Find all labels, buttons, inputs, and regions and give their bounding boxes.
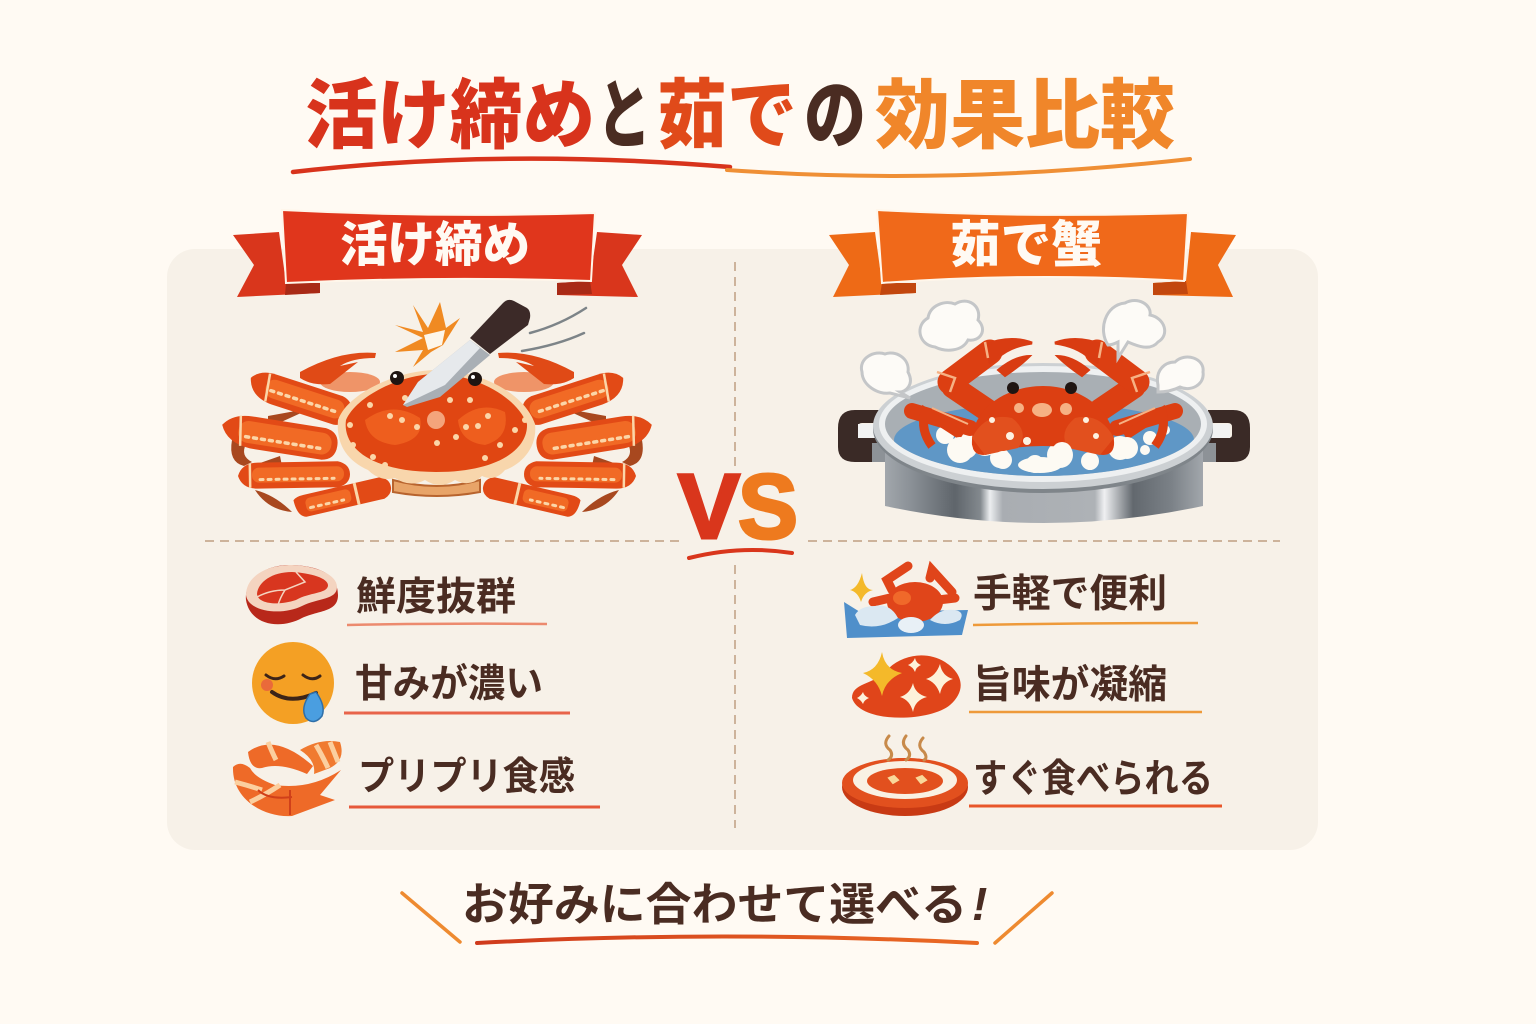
foam — [947, 437, 1150, 473]
illustration: snow crab with knife — [219, 300, 655, 519]
icon: hot dish — [842, 736, 968, 816]
closing message: ! — [972, 878, 987, 930]
VS badge — [678, 456, 798, 558]
title: 茹で — [657, 74, 797, 159]
closing message: お好みに合わせて選べる — [462, 879, 967, 930]
text: 旨味が凝縮: 旨味が凝縮 — [973, 664, 1167, 707]
pot body — [885, 430, 1203, 523]
illustration: crab boiling in pot — [838, 301, 1250, 523]
icon: knife — [403, 300, 530, 407]
steam clouds — [861, 301, 1203, 398]
underline — [973, 623, 1198, 625]
title: の — [804, 74, 866, 159]
left benefits list — [233, 565, 600, 816]
title: と — [597, 74, 651, 159]
panel: comparison card — [167, 249, 1318, 850]
underline — [969, 804, 1222, 808]
text: 甘みが濃い: 甘みが濃い — [355, 663, 543, 706]
text: 鮮度抜群: 鮮度抜群 — [356, 576, 516, 619]
title: 効果比較 — [875, 74, 1175, 159]
text: プリプリ食感: プリプリ食感 — [358, 756, 575, 799]
closing message — [402, 878, 1052, 943]
VS badge: V — [678, 456, 740, 558]
pot rim — [873, 365, 1213, 493]
underline — [969, 711, 1202, 713]
panel dividers — [205, 262, 1280, 828]
text: すぐ食べられる: すぐ食べられる — [973, 758, 1213, 801]
boiling water — [894, 403, 1194, 477]
underline — [344, 712, 570, 714]
ribbon label: 活け締め — [340, 219, 530, 272]
ribbon: 茹で蟹 — [829, 210, 1236, 297]
ribbon label: 茹で蟹 — [950, 217, 1102, 273]
title — [305, 74, 1175, 159]
text: 手軽で便利: 手軽で便利 — [973, 573, 1167, 616]
right benefits list — [842, 566, 1222, 816]
crab body — [338, 370, 535, 496]
icon: impact burst — [395, 302, 460, 367]
icon: meat — [246, 565, 338, 624]
icon: smiling face — [252, 642, 334, 724]
title underline — [293, 159, 1190, 176]
VS badge: S — [738, 456, 798, 558]
pot handles — [838, 410, 1250, 462]
icon: crab on ice — [844, 566, 968, 638]
icon: shrimp — [233, 741, 342, 816]
underline — [349, 806, 600, 808]
icon: sparkling crab meat — [852, 652, 961, 718]
motion lines — [522, 308, 586, 351]
title: 活け締め — [305, 74, 595, 159]
ribbon: 活け締め — [233, 210, 642, 297]
underline — [347, 624, 547, 625]
boiled crab — [912, 339, 1175, 455]
